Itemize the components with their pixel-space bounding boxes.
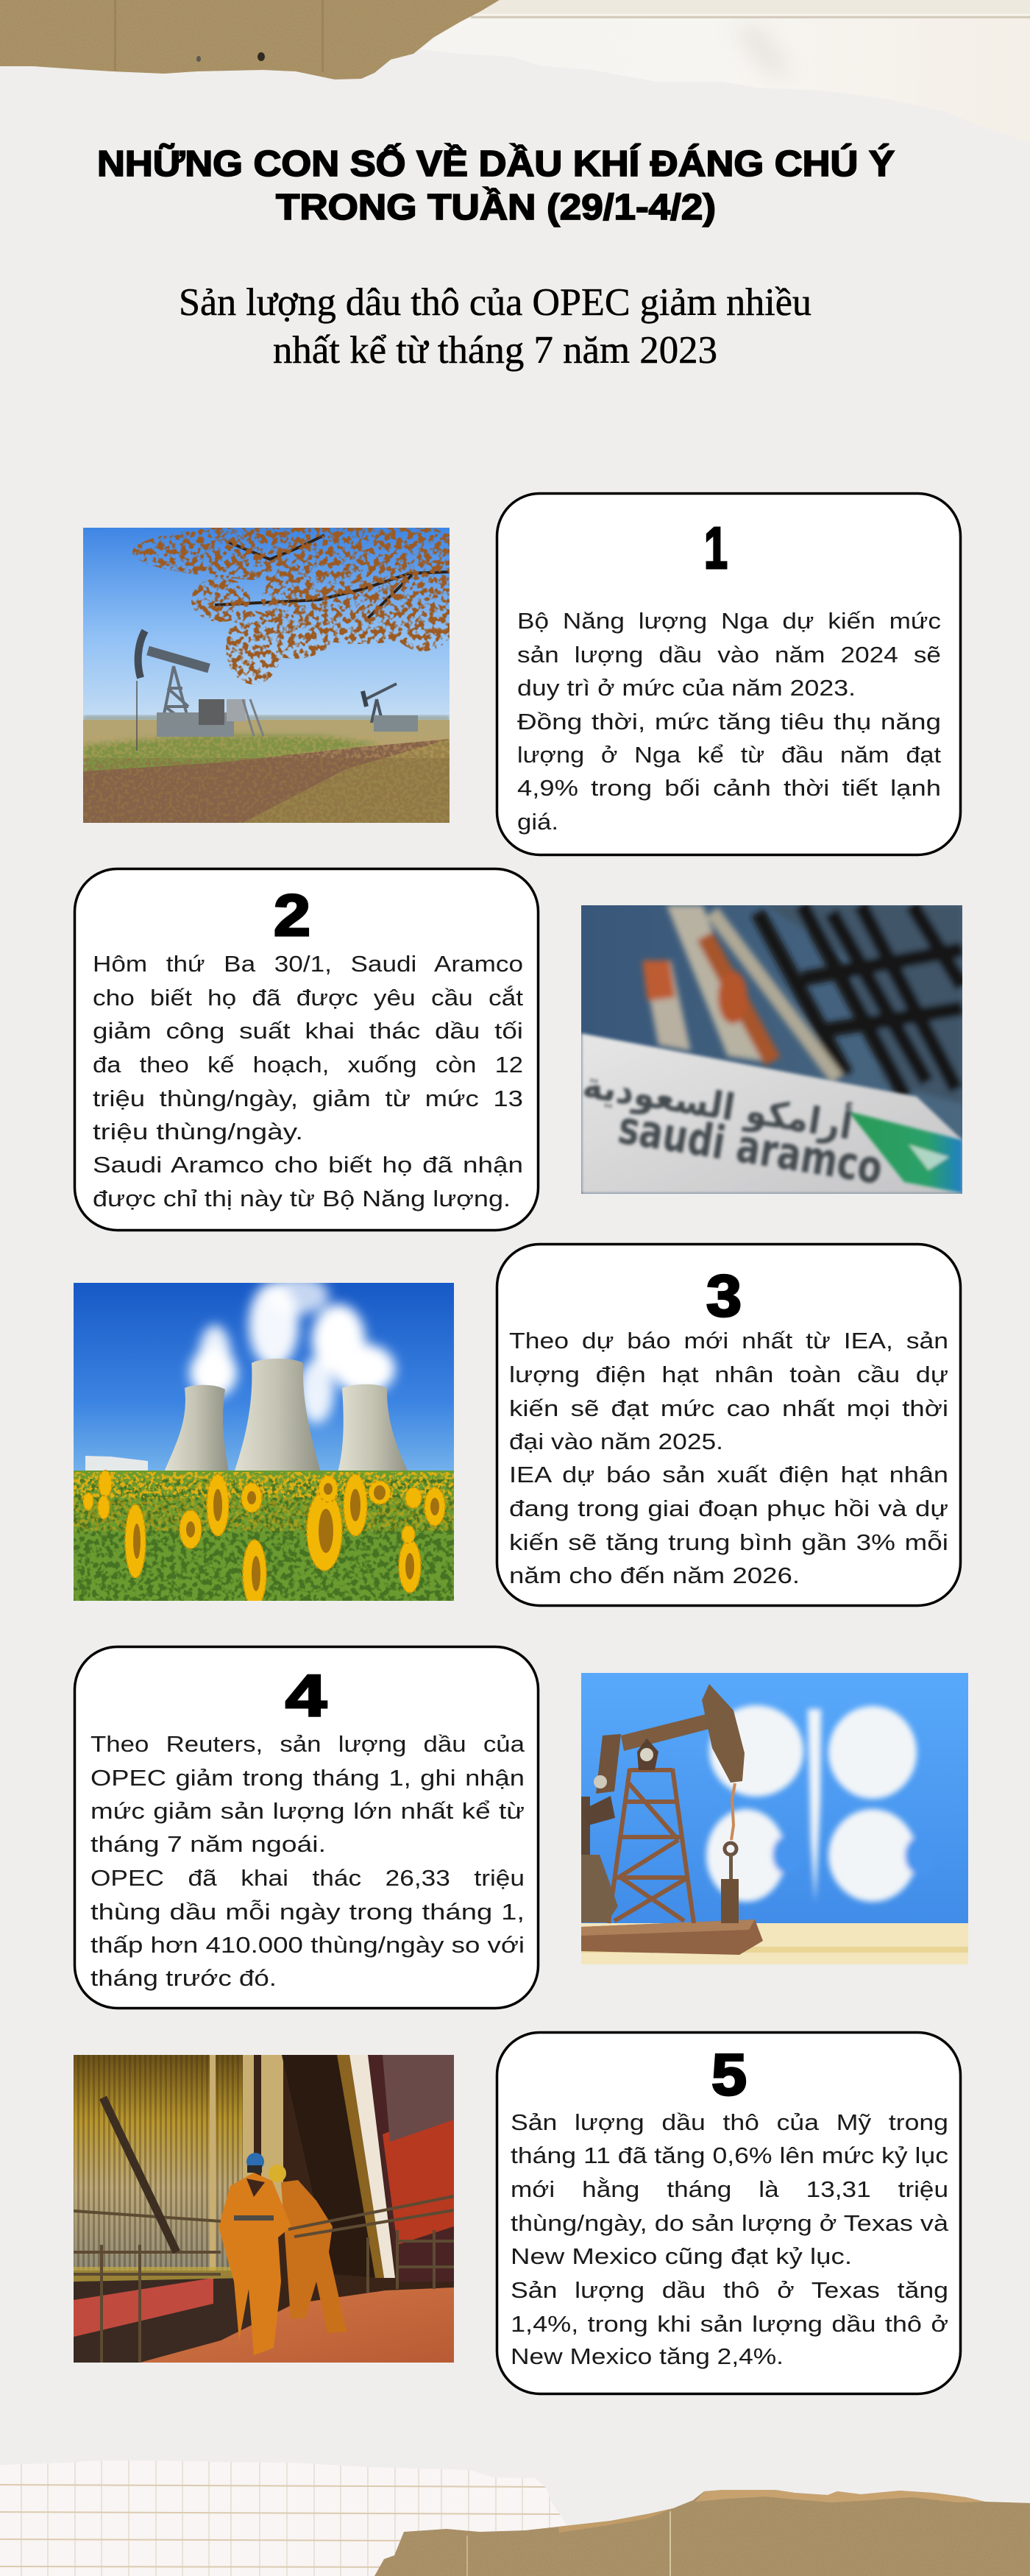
body text 1: lượng ở Nga kể từ đầu năm đạt (517, 742, 941, 768)
body text 3: kiến sẽ đạt mức cao nhất mọi thời (509, 1395, 948, 1421)
body text 2: giảm công suất khai thác dầu tối (93, 1018, 523, 1044)
number 3: 3 (706, 1263, 742, 1328)
sunflower field (74, 1471, 454, 1601)
body text 2: cho biết họ đã được yêu cầu cắt (93, 985, 523, 1011)
number 2: 2 (274, 882, 310, 948)
body text 5: Sản lượng dầu thô của Mỹ trong (511, 2109, 948, 2135)
body text 1: 4,9% trong bối cảnh thời tiết lạnh (517, 775, 941, 801)
body text 5: 1,4%, trong khi sản lượng dầu thô ở (511, 2311, 948, 2337)
body text 2: được chỉ thị này từ Bộ Năng lượng. (93, 1186, 511, 1211)
body text 4: thấp hơn 410.000 thùng/ngày so với (90, 1932, 525, 1958)
body text 1 (517, 608, 941, 835)
body text 3: năm cho đến năm 2026. (509, 1563, 800, 1588)
body text 5: New Mexico cũng đạt kỷ lục. (511, 2243, 852, 2269)
body text 4: tháng trước đó. (90, 1965, 277, 1991)
sign wordmark: أرامكو السعودية (580, 1061, 856, 1149)
body text 4: mức giảm sản lượng lớn nhất kể từ (90, 1798, 525, 1824)
saudi aramco logo mark (848, 1111, 962, 1193)
panel: fact 3 (497, 1244, 961, 1606)
body text 3: đang trong giai đoạn phục hồi và dự (509, 1496, 948, 1521)
body text 1: sản lượng dầu vào năm 2024 sẽ (517, 642, 941, 668)
right cooling tower (337, 1384, 410, 1475)
card background (75, 868, 539, 1231)
sign wordmark: saudi aramco (615, 1100, 887, 1195)
pumpjack model (581, 1684, 763, 1955)
photo: oil pumpjacks in an autumn field (83, 528, 450, 823)
dark door (282, 2055, 383, 2278)
autumn foliage (132, 528, 450, 684)
OPEC logo (706, 1705, 934, 1903)
photo: miniature pumpjack with OPEC logo (581, 1673, 968, 1964)
body text 2: triệu thùng/ngày. (93, 1119, 303, 1144)
card background (497, 1244, 961, 1606)
body text 3: Theo dự báo mới nhất từ IEA, sản (509, 1328, 948, 1354)
photo: Saudi Aramco sign (580, 905, 962, 1195)
body text 2: triệu thùng/ngày, giảm từ mức 13 (93, 1086, 523, 1111)
card background (75, 1647, 539, 2008)
lower deck structure (74, 2271, 250, 2363)
body text 5: thùng/ngày, do sản lượng ở Texas và (511, 2210, 949, 2236)
card background (497, 493, 961, 855)
body text 5: Sản lượng dầu thô ở Texas tăng (511, 2277, 948, 2303)
left cooling tower (164, 1385, 229, 1472)
large pumpjack (137, 631, 263, 751)
body text 1: Đồng thời, mức tăng tiêu thụ năng (517, 709, 941, 735)
body text 3: kiến sẽ tăng trung bình gần 3% mỗi (509, 1529, 948, 1555)
steam clouds (190, 1276, 395, 1423)
sign wordmark (582, 1077, 883, 1185)
body text 2 (93, 951, 523, 1211)
panel: fact 5 (497, 2033, 961, 2393)
body text 3 (509, 1328, 948, 1588)
body text 4: tháng 7 năm ngoái. (90, 1831, 326, 1857)
body text 3: IEA dự báo sản xuất điện hạt nhân (509, 1462, 948, 1487)
subtitle: Sản lượng dâu thô của OPEC giảm nhiều (179, 281, 811, 324)
body text 3: đại vào năm 2025. (509, 1429, 723, 1454)
small pumpjack (363, 684, 418, 732)
white sign board (581, 1033, 962, 1194)
title: NHỮNG CON SỐ VỀ DẦU KHÍ ĐÁNG CHÚ Ý (97, 144, 895, 184)
building (85, 1456, 148, 1471)
number 4: 4 (285, 1663, 327, 1728)
torn kraft paper: top left (0, 0, 500, 79)
photo: oil rig workers in orange overalls (74, 2055, 454, 2363)
number 5: 5 (711, 2042, 747, 2107)
panel: fact 2 (75, 868, 539, 1231)
torn paper: top right (471, 0, 1030, 65)
torn kraft paper: bottom right (374, 2490, 1030, 2576)
orange floor (140, 2287, 454, 2363)
body text 5: mới hằng tháng là 13,31 triệu (511, 2176, 948, 2202)
body text 3: lượng điện hạt nhân toàn cầu dự (509, 1362, 948, 1387)
centre cooling tower (233, 1359, 322, 1475)
graph paper: bottom left (0, 2458, 568, 2576)
body text 1: giá. (517, 809, 558, 835)
body text 1: duy trì ở mức của năm 2023. (517, 675, 856, 701)
title (97, 144, 895, 227)
subtitle (179, 281, 811, 372)
body text 4: thùng dầu mỗi ngày trong tháng 1, (90, 1899, 525, 1925)
body text 5: New Mexico tăng 2,4%. (511, 2343, 784, 2369)
worker rear (269, 2165, 347, 2333)
body text 2: Hôm thứ Ba 30/1, Saudi Aramco (93, 951, 523, 977)
body text 2: Saudi Aramco cho biết họ đã nhận (93, 1152, 523, 1178)
white column (349, 2055, 395, 2278)
body text 5: tháng 11 đã tăng 0,6% lên mức kỷ lục (511, 2142, 948, 2168)
ropes and railing (74, 2196, 454, 2363)
photo: nuclear cooling towers and sunflowers (74, 1276, 454, 1607)
body text 4: OPEC giảm trong tháng 1, ghi nhận (90, 1765, 525, 1791)
card background (497, 2033, 961, 2393)
number 1: 1 (704, 515, 728, 581)
panel: fact 1 (497, 493, 961, 855)
body text 5 (511, 2109, 949, 2369)
body text 4: Theo Reuters, sản lượng dầu của (90, 1731, 525, 1757)
title: TRONG TUẦN (29/1-4/2) (276, 188, 716, 227)
sunflowers (83, 1471, 445, 1607)
body text 2: đa theo kế hoạch, xuống còn 12 (93, 1052, 523, 1078)
panel: fact 4 (75, 1647, 539, 2008)
body text 4 (90, 1731, 525, 1991)
body text 4: OPEC đã khai thác 26,33 triệu (90, 1865, 525, 1891)
worker front (219, 2153, 291, 2355)
red wall (368, 2055, 454, 2282)
body text 1: Bộ Năng lượng Nga dự kiến mức (517, 608, 941, 634)
tree branches (215, 535, 450, 618)
subtitle: nhất kể từ tháng 7 năm 2023 (273, 329, 717, 372)
pipes (210, 2055, 283, 2282)
